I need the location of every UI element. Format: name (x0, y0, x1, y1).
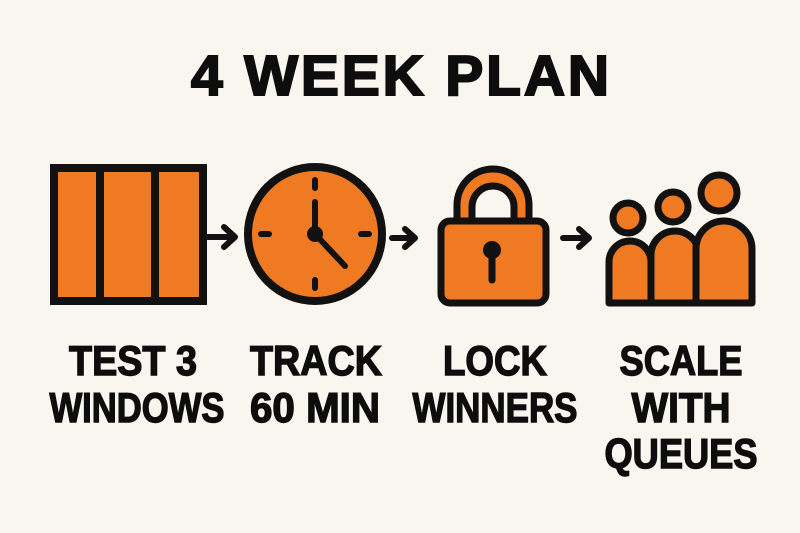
label: track 60 min (250, 337, 382, 431)
label: lock winners: LOCK (443, 337, 547, 384)
icon: clock (248, 167, 382, 301)
label: scale with queues: QUEUES (604, 430, 758, 477)
title: 4 WEEK PLAN (191, 44, 609, 108)
label: test 3 windows: WINDOWS (50, 384, 224, 431)
label: scale with queues: WITH (632, 384, 730, 431)
arrow 1 (208, 227, 235, 247)
arrow 3 (563, 229, 589, 247)
label: test 3 windows: TEST 3 (69, 337, 197, 384)
label: test 3 windows (50, 337, 224, 431)
icon: padlock (441, 169, 546, 303)
arrow 2 (392, 229, 415, 247)
icon: people group (609, 175, 752, 303)
icon: three windows (54, 168, 203, 301)
label: track 60 min: 60 MIN (250, 384, 380, 431)
label: lock winners: WINNERS (412, 384, 578, 431)
label: scale with queues (604, 337, 758, 477)
label: lock winners (412, 337, 578, 431)
label: scale with queues: SCALE (620, 337, 742, 384)
label: track 60 min: TRACK (250, 337, 382, 384)
